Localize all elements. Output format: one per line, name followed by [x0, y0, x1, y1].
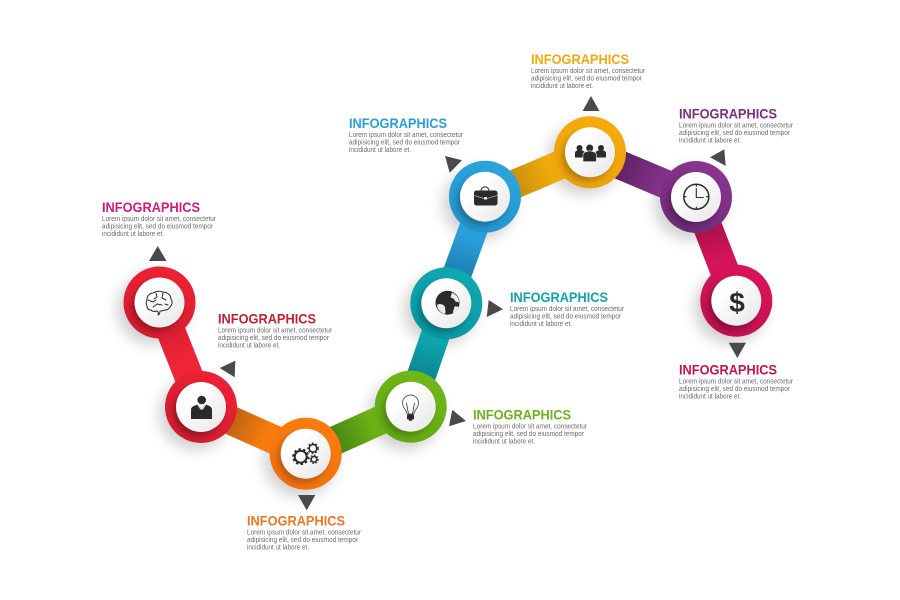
text block: purple — [679, 106, 794, 144]
text block: green: Lorem ipsum dolor sit amet, consectetur — [473, 424, 588, 430]
text block: purple: incididunt ut labore et. — [679, 138, 741, 144]
text block: crimson — [679, 362, 794, 400]
text block: red: incididunt ut labore et. — [218, 342, 280, 350]
arrow: dollar — [729, 343, 746, 358]
icon: businessman — [191, 396, 212, 419]
text block: orange: Lorem ipsum dolor sit amet, consectetur — [247, 530, 362, 536]
icon: gears — [293, 443, 318, 464]
text block: purple: INFOGRAPHICS — [679, 106, 777, 122]
icon: brain — [146, 291, 172, 315]
text block: red: adipisicing elit, sed do eiusmod tempor — [218, 335, 330, 342]
icon: dollar sign: $ — [729, 287, 745, 318]
text block: yellow: INFOGRAPHICS — [531, 51, 629, 67]
icon: team of people — [575, 144, 606, 162]
text block: red: Lorem ipsum dolor sit amet, consectetur — [218, 328, 333, 334]
node 2: person — [165, 371, 237, 443]
arrow: gears — [298, 495, 315, 510]
text block: blue: adipisicing elit, sed do eiusmod tempor — [349, 140, 461, 146]
text block: crimson: Lorem ipsum dolor sit amet, consectetur — [679, 378, 794, 386]
text block: pink: incididunt ut labore et. — [102, 231, 164, 238]
text block: green: adipisicing elit, sed do eiusmod tempor — [473, 431, 585, 438]
text block: red: INFOGRAPHICS — [218, 310, 316, 326]
node 8: clock — [660, 161, 732, 233]
node 5: globe — [410, 267, 482, 339]
text block: orange: incididunt ut labore et. — [247, 544, 309, 552]
text block: purple: adipisicing elit, sed do eiusmod tempor — [679, 130, 791, 137]
text block: pink: adipisicing elit, sed do eiusmod tempor — [102, 224, 214, 230]
text block: teal: INFOGRAPHICS — [510, 289, 608, 305]
text block: crimson: adipisicing elit, sed do eiusmod tempor — [679, 386, 791, 393]
text block: green — [473, 406, 588, 446]
node 6: briefcase — [449, 161, 521, 233]
text block: crimson: INFOGRAPHICS — [679, 362, 777, 378]
node 9: dollar — [700, 265, 772, 337]
arrow: bulb — [449, 410, 466, 426]
arrow: clock — [710, 149, 726, 166]
text block: orange: adipisicing elit, sed do eiusmod tempor — [247, 537, 359, 544]
text block: yellow: Lorem ipsum dolor sit amet, consectetur — [531, 68, 646, 75]
text block: teal: adipisicing elit, sed do eiusmod tempor — [510, 314, 622, 320]
text block: blue: INFOGRAPHICS — [349, 115, 447, 131]
text block: pink: Lorem ipsum dolor sit amet, consectetur — [102, 216, 217, 223]
arrow: briefcase — [445, 156, 462, 173]
text block: crimson: incididunt ut labore et. — [679, 394, 741, 400]
text block: green: INFOGRAPHICS — [473, 406, 571, 422]
icon: clock — [684, 184, 709, 209]
text block: teal: incididunt ut labore et. — [510, 321, 572, 328]
node 4: light bulb — [375, 371, 447, 443]
text block: orange: INFOGRAPHICS — [247, 512, 345, 528]
arrow: person — [220, 361, 235, 377]
text block: teal — [510, 289, 625, 328]
text block: blue — [349, 115, 464, 154]
arrow: team — [582, 96, 600, 111]
text block: green: incididunt ut labore et. — [473, 438, 535, 446]
arrow: globe — [487, 300, 503, 317]
text block: yellow: adipisicing elit, sed do eiusmod tempor — [531, 76, 643, 82]
text block: purple: Lorem ipsum dolor sit amet, consectetur — [679, 122, 794, 130]
icon: bulb — [402, 395, 418, 421]
icon: globe — [436, 291, 460, 315]
text block: red — [218, 310, 333, 350]
text block: blue: incididunt ut labore et. — [349, 147, 411, 154]
node 1: brain — [124, 266, 196, 338]
text block: pink — [102, 199, 217, 238]
text block: teal: Lorem ipsum dolor sit amet, consectetur — [510, 306, 625, 313]
icon: briefcase — [474, 187, 498, 206]
text block: blue: Lorem ipsum dolor sit amet, consectetur — [349, 132, 464, 139]
arrow: brain — [149, 246, 166, 261]
node 3: gears — [270, 418, 342, 490]
winding path connectors — [160, 152, 736, 454]
soft shadows beneath the path — [117, 123, 766, 497]
node 7: team — [554, 116, 626, 188]
text block: yellow — [531, 51, 646, 90]
text block: orange — [247, 512, 362, 552]
text block: yellow: incididunt ut labore et. — [531, 83, 593, 90]
text block: pink: INFOGRAPHICS — [102, 199, 200, 215]
